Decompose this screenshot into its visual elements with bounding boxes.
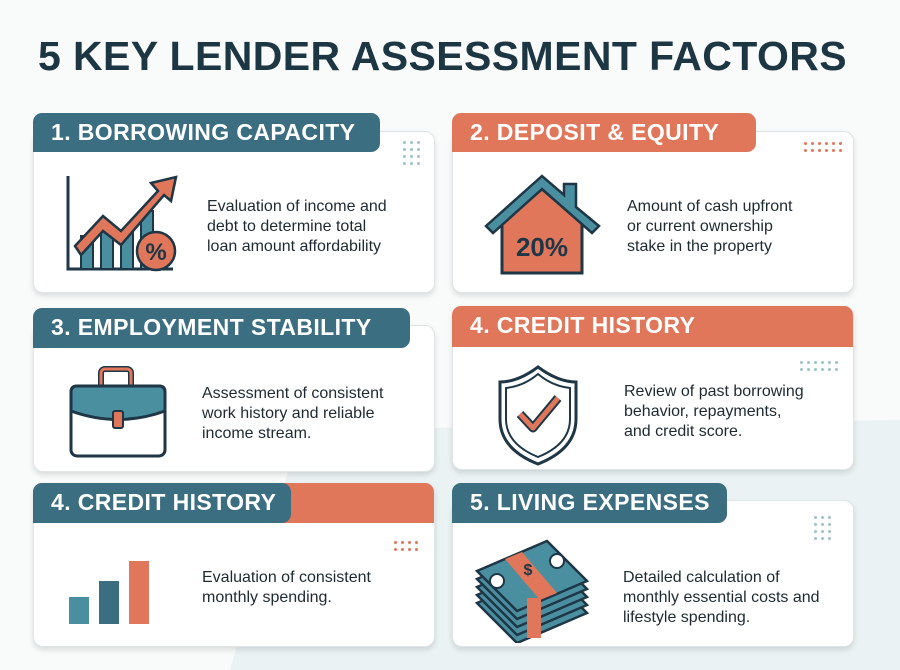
description: debt to determine total	[207, 218, 366, 235]
panel: credit history (bars): 4. CREDIT HISTORY	[51, 489, 276, 515]
description: monthly spending.	[202, 589, 332, 606]
icon: growth chart	[66, 175, 178, 272]
description: Amount of cash upfront	[627, 198, 792, 215]
description: lifestyle spending.	[623, 609, 750, 626]
description: Evaluation of consistent	[202, 569, 371, 586]
description: and credit score.	[624, 423, 742, 440]
icon: cash stack	[474, 540, 590, 643]
description	[624, 383, 804, 440]
icon: briefcase	[70, 366, 166, 458]
icon: house 20%: 20%	[516, 232, 568, 262]
dots	[800, 361, 838, 371]
heading	[452, 483, 727, 523]
heading	[33, 483, 434, 523]
icon: house 20%	[484, 174, 601, 274]
panel: employment stability	[32, 308, 436, 476]
panel: credit history (bars)	[32, 483, 436, 652]
description: Detailed calculation of	[623, 569, 780, 586]
panel: credit history (shield)	[450, 306, 856, 474]
description: loan amount affordability	[207, 238, 381, 255]
icon: cash stack: $	[524, 562, 533, 579]
dots	[394, 541, 418, 551]
dots	[403, 141, 420, 165]
description: behavior, repayments,	[624, 403, 781, 420]
heading: 3. EMPLOYMENT STABILITY	[51, 314, 372, 340]
description: or current ownership	[627, 218, 773, 235]
description	[202, 385, 384, 442]
description: Assessment of consistent	[202, 385, 383, 402]
icon: bar chart	[69, 561, 149, 624]
icon: growth chart: %	[145, 239, 167, 266]
description: income stream.	[202, 425, 311, 442]
heading: 2. DEPOSIT & EQUITY	[470, 119, 719, 145]
description: Review of past borrowing	[624, 383, 804, 400]
description: stake in the property	[627, 238, 772, 255]
panel: living expenses	[450, 483, 856, 652]
description: Evaluation of income and	[207, 198, 387, 215]
description	[623, 569, 820, 626]
description: work history and reliable	[202, 405, 375, 422]
panel: borrowing capacity	[32, 113, 436, 298]
heading: 4. CREDIT HISTORY	[470, 312, 695, 338]
heading: 5. LIVING EXPENSES	[470, 489, 710, 515]
heading	[452, 113, 756, 152]
description	[627, 198, 792, 255]
heading: 1. BORROWING CAPACITY	[51, 119, 355, 145]
heading	[33, 113, 380, 152]
icon: shield check	[498, 365, 578, 466]
description: monthly essential costs and	[623, 589, 820, 606]
panel: deposit & equity	[450, 113, 856, 298]
heading	[33, 308, 410, 348]
dots	[804, 142, 842, 152]
description	[202, 569, 371, 606]
description	[207, 198, 387, 255]
dots	[814, 516, 831, 540]
title: 5 KEY LENDER ASSESSMENT FACTORS	[38, 33, 847, 79]
heading	[452, 306, 853, 347]
